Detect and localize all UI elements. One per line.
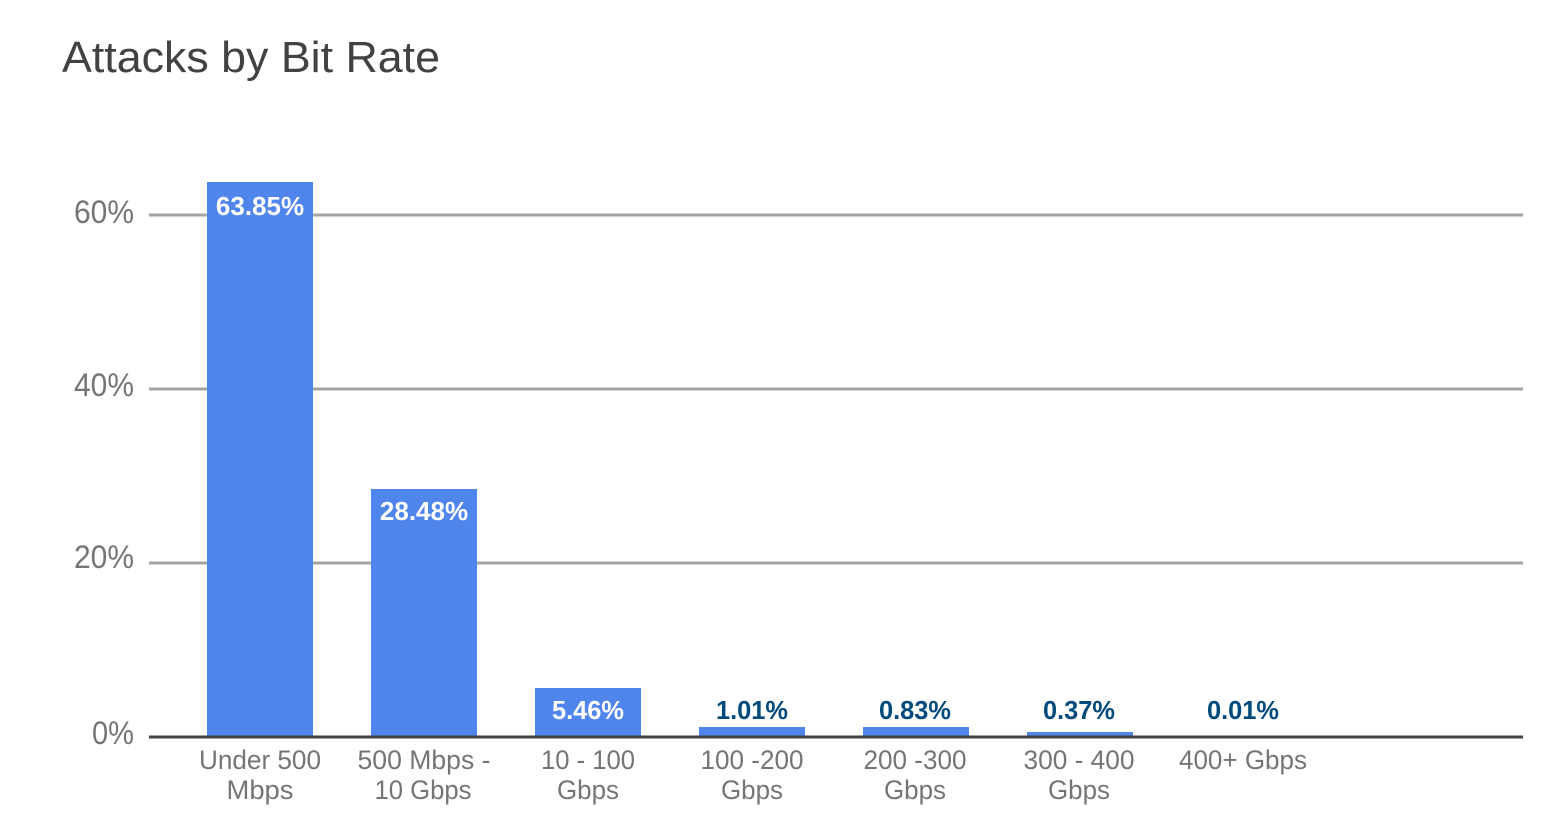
x axis labels: 10 - 100 [541, 745, 635, 775]
x axis labels: Gbps [1048, 775, 1110, 805]
value labels above bars: 0.01% [1207, 695, 1279, 725]
y axis labels: 20% [74, 539, 134, 575]
x axis labels: 400+ Gbps [1179, 745, 1307, 775]
x axis labels: 300 - 400 [1024, 745, 1134, 775]
value labels above bars: 0.37% [1043, 695, 1115, 725]
x axis labels: 10 Gbps [374, 775, 472, 805]
value labels inside bars: 5.46% [552, 695, 624, 725]
x axis labels: Gbps [557, 775, 619, 805]
x axis labels [199, 745, 1307, 805]
value labels above bars: 1.01% [716, 695, 788, 725]
value labels inside bars [216, 191, 624, 725]
y axis labels: 60% [74, 194, 134, 230]
gridlines [149, 215, 1523, 563]
title: Attacks by Bit Rate [62, 33, 440, 82]
value labels inside bars: 63.85% [216, 191, 304, 221]
baseline [149, 736, 1523, 738]
x axis labels: Gbps [721, 775, 783, 805]
bars [207, 182, 1133, 737]
x axis labels: 200 -300 [864, 745, 966, 775]
value labels above bars: 0.83% [879, 695, 951, 725]
y axis labels [74, 194, 134, 751]
value labels above bars [716, 695, 1279, 725]
x axis labels: Under 500 [199, 745, 321, 775]
x axis labels: Gbps [884, 775, 946, 805]
x axis labels: 100 -200 [700, 745, 804, 775]
x axis labels: 500 Mbps - [358, 745, 490, 775]
value labels inside bars: 28.48% [380, 496, 468, 526]
y axis labels: 0% [92, 715, 134, 751]
y axis labels: 40% [74, 367, 134, 403]
x axis labels: Mbps [226, 775, 294, 805]
